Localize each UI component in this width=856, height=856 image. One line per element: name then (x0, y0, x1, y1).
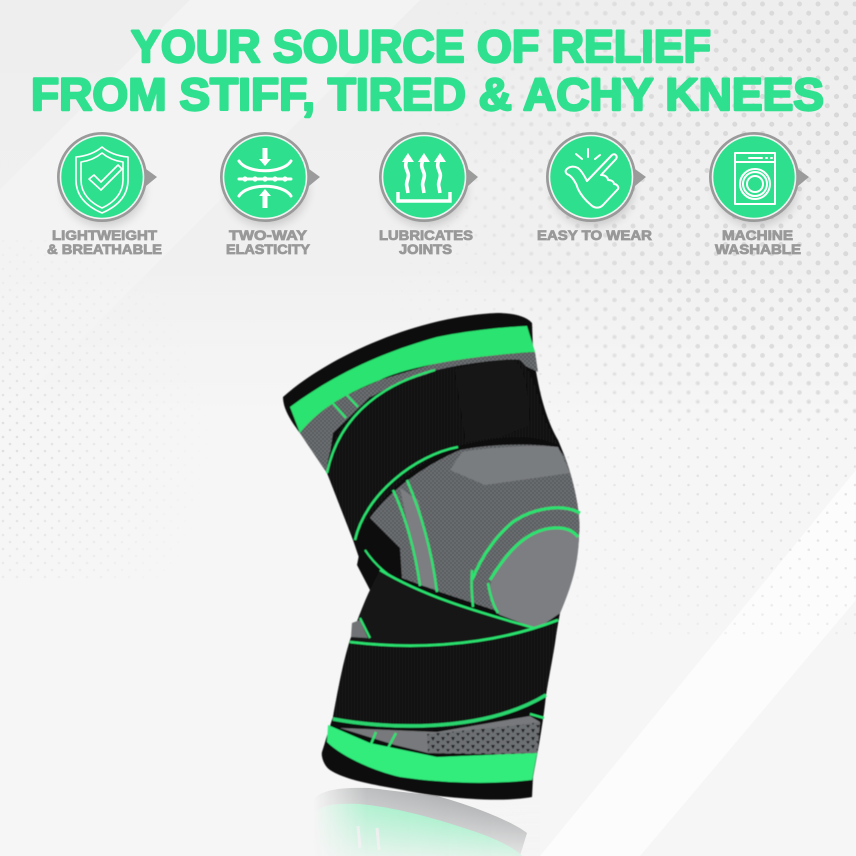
feature: lightweight and breathable (47, 134, 162, 257)
icon: heat waves (398, 153, 450, 201)
knee brace (283, 313, 580, 800)
green arcs (472, 508, 580, 580)
upper strap (327, 359, 558, 540)
label: ELASTICITY (226, 242, 310, 257)
lower wide strap (333, 620, 558, 728)
middle diagonal strap line (380, 570, 537, 629)
label: TWO-WAY (229, 228, 307, 243)
reflection (320, 788, 527, 856)
feature: two-way elasticity (222, 134, 320, 257)
knee cap (489, 528, 579, 629)
icon: elasticity arrows (239, 148, 291, 208)
label: & BREATHABLE (47, 242, 162, 257)
title (31, 21, 824, 120)
label: MACHINE (722, 228, 793, 243)
light band (450, 446, 570, 485)
bottom gray knit (340, 716, 540, 755)
label: LIGHTWEIGHT (52, 228, 158, 243)
label (47, 228, 162, 257)
title: FROM STIFF, TIRED & ACHY KNEES (31, 69, 824, 120)
strap edge lines (327, 370, 435, 473)
icon: washing machine (735, 153, 775, 204)
middle strap (350, 570, 558, 655)
label: WASHABLE (715, 242, 801, 257)
label (226, 228, 310, 257)
label: JOINTS (399, 242, 452, 257)
feature: machine washable (710, 134, 809, 257)
sleeve silhouette (283, 313, 579, 800)
label: LUBRICATES (379, 228, 473, 243)
feature: easy to wear (537, 134, 652, 243)
label (715, 228, 801, 257)
central gray knit panel (370, 445, 579, 629)
bottom green band (327, 725, 537, 783)
small gray tab (351, 620, 368, 638)
feature: lubricates joints (379, 134, 478, 257)
label: EASY TO WEAR (537, 228, 652, 243)
title: YOUR SOURCE OF RELIEF (131, 21, 711, 72)
top green band (290, 326, 535, 433)
label (379, 228, 473, 257)
top gray knit (300, 352, 538, 473)
left inner black strap (357, 550, 400, 590)
icon: shield (76, 147, 128, 213)
icon: snapping hand (566, 149, 618, 208)
